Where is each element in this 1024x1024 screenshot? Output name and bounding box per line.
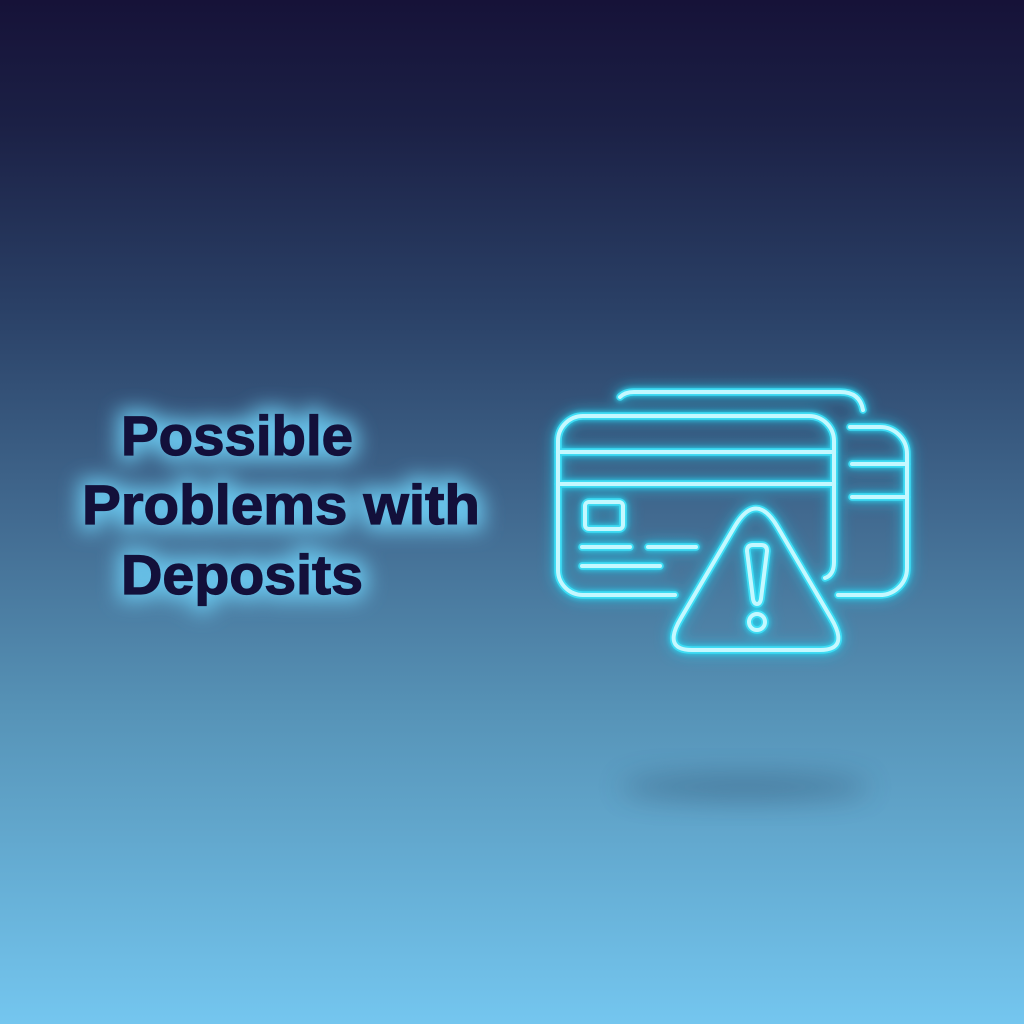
icon: neon credit cards with warning triangle	[558, 392, 907, 650]
title glow: Problems with	[82, 473, 480, 536]
title text: Problems with	[82, 473, 480, 536]
title text: Possible	[121, 404, 353, 467]
title glow: Possible	[121, 404, 353, 467]
title glow	[82, 404, 480, 606]
title text	[82, 404, 480, 606]
floating icon shadow	[620, 774, 870, 800]
title with glow	[82, 404, 480, 606]
title text: Deposits	[121, 543, 363, 606]
title glow: Deposits	[121, 543, 363, 606]
